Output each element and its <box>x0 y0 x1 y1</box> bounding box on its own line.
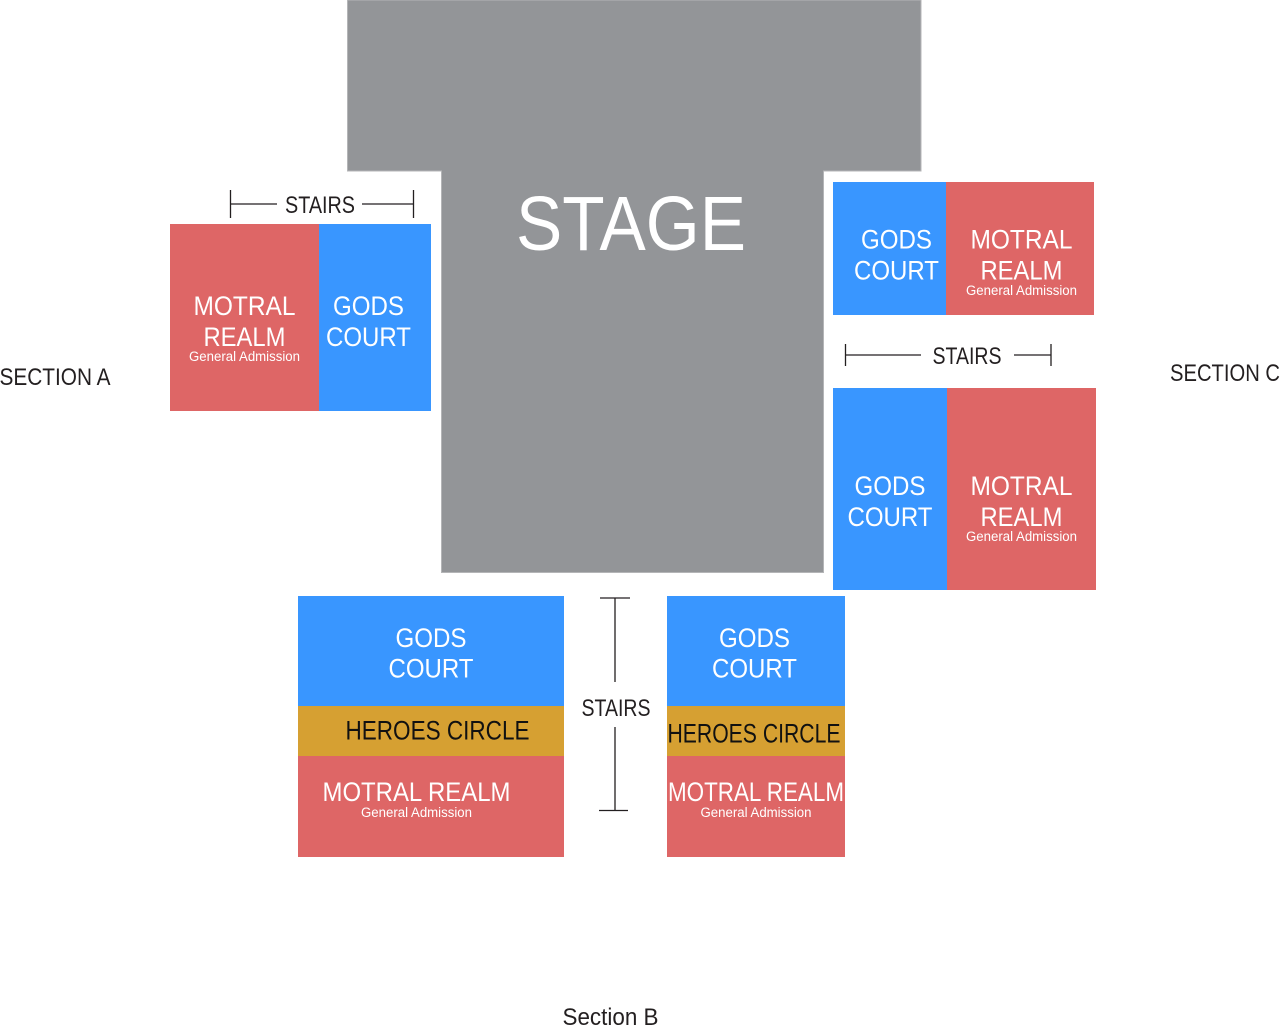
gods court block B left <box>298 596 564 706</box>
stairs marker A: STAIRS <box>285 192 355 219</box>
gods court block B left: COURT <box>388 654 474 684</box>
mortal realm block C upper: REALM <box>980 256 1062 286</box>
gods court block A: GODS <box>333 291 404 321</box>
mortal realm block C upper <box>946 182 1094 315</box>
heroes circle block B left: HEROES CIRCLE <box>346 716 530 746</box>
mortal realm block C lower: MOTRAL <box>970 471 1072 501</box>
gods court block B left: GODS <box>396 623 466 653</box>
mortal realm block B left <box>298 756 564 857</box>
mortal realm block B right <box>667 756 845 857</box>
heroes circle block B left <box>298 706 564 756</box>
mortal realm block A: General Admission <box>189 349 300 364</box>
mortal realm block C lower: REALM <box>980 502 1062 532</box>
stage <box>348 0 921 572</box>
mortal realm block B right: MOTRAL REALM <box>668 777 844 807</box>
mortal realm block C lower <box>947 388 1096 590</box>
stairs marker B <box>582 598 650 810</box>
heroes circle block B right: HEROES CIRCLE <box>668 718 840 748</box>
stairs marker A <box>230 190 414 219</box>
gods court block B right <box>667 596 845 706</box>
gods court block C upper: GODS <box>861 224 932 254</box>
panel: section C upper seating <box>833 182 1094 315</box>
mortal realm block C upper: General Admission <box>966 283 1077 298</box>
gods court block C lower: COURT <box>848 502 932 532</box>
stairs marker B: STAIRS <box>582 695 650 722</box>
mortal realm block A <box>170 224 319 411</box>
stage label: STAGE <box>516 181 746 267</box>
mortal realm block B right: General Admission <box>700 805 812 820</box>
stairs marker C <box>846 343 1051 370</box>
panel: section C lower seating <box>833 388 1096 590</box>
mortal realm block B left: MOTRAL REALM <box>322 777 510 807</box>
mortal realm block A: MOTRAL <box>194 291 296 321</box>
gods court block B right: GODS <box>719 623 790 653</box>
mortal realm block C lower: General Admission <box>966 529 1077 544</box>
panel: section B right seating <box>667 596 845 857</box>
gods court block C upper <box>833 182 946 315</box>
gods court block C lower <box>833 388 947 590</box>
section A label: SECTION A <box>0 364 110 391</box>
mortal realm block B left: General Admission <box>361 805 472 820</box>
gods court block C lower: GODS <box>854 471 926 501</box>
mortal realm block A: REALM <box>204 322 286 352</box>
panel: section B left seating <box>298 596 564 857</box>
stairs marker C: STAIRS <box>932 343 1002 370</box>
gods court block C upper: COURT <box>854 256 939 286</box>
mortal realm block C upper: MOTRAL <box>970 224 1072 254</box>
gods court block B right: COURT <box>712 654 797 684</box>
gods court block A <box>319 224 431 411</box>
heroes circle block B right <box>667 706 845 756</box>
gods court block A: COURT <box>326 322 411 352</box>
panel: section A seating <box>170 224 431 411</box>
